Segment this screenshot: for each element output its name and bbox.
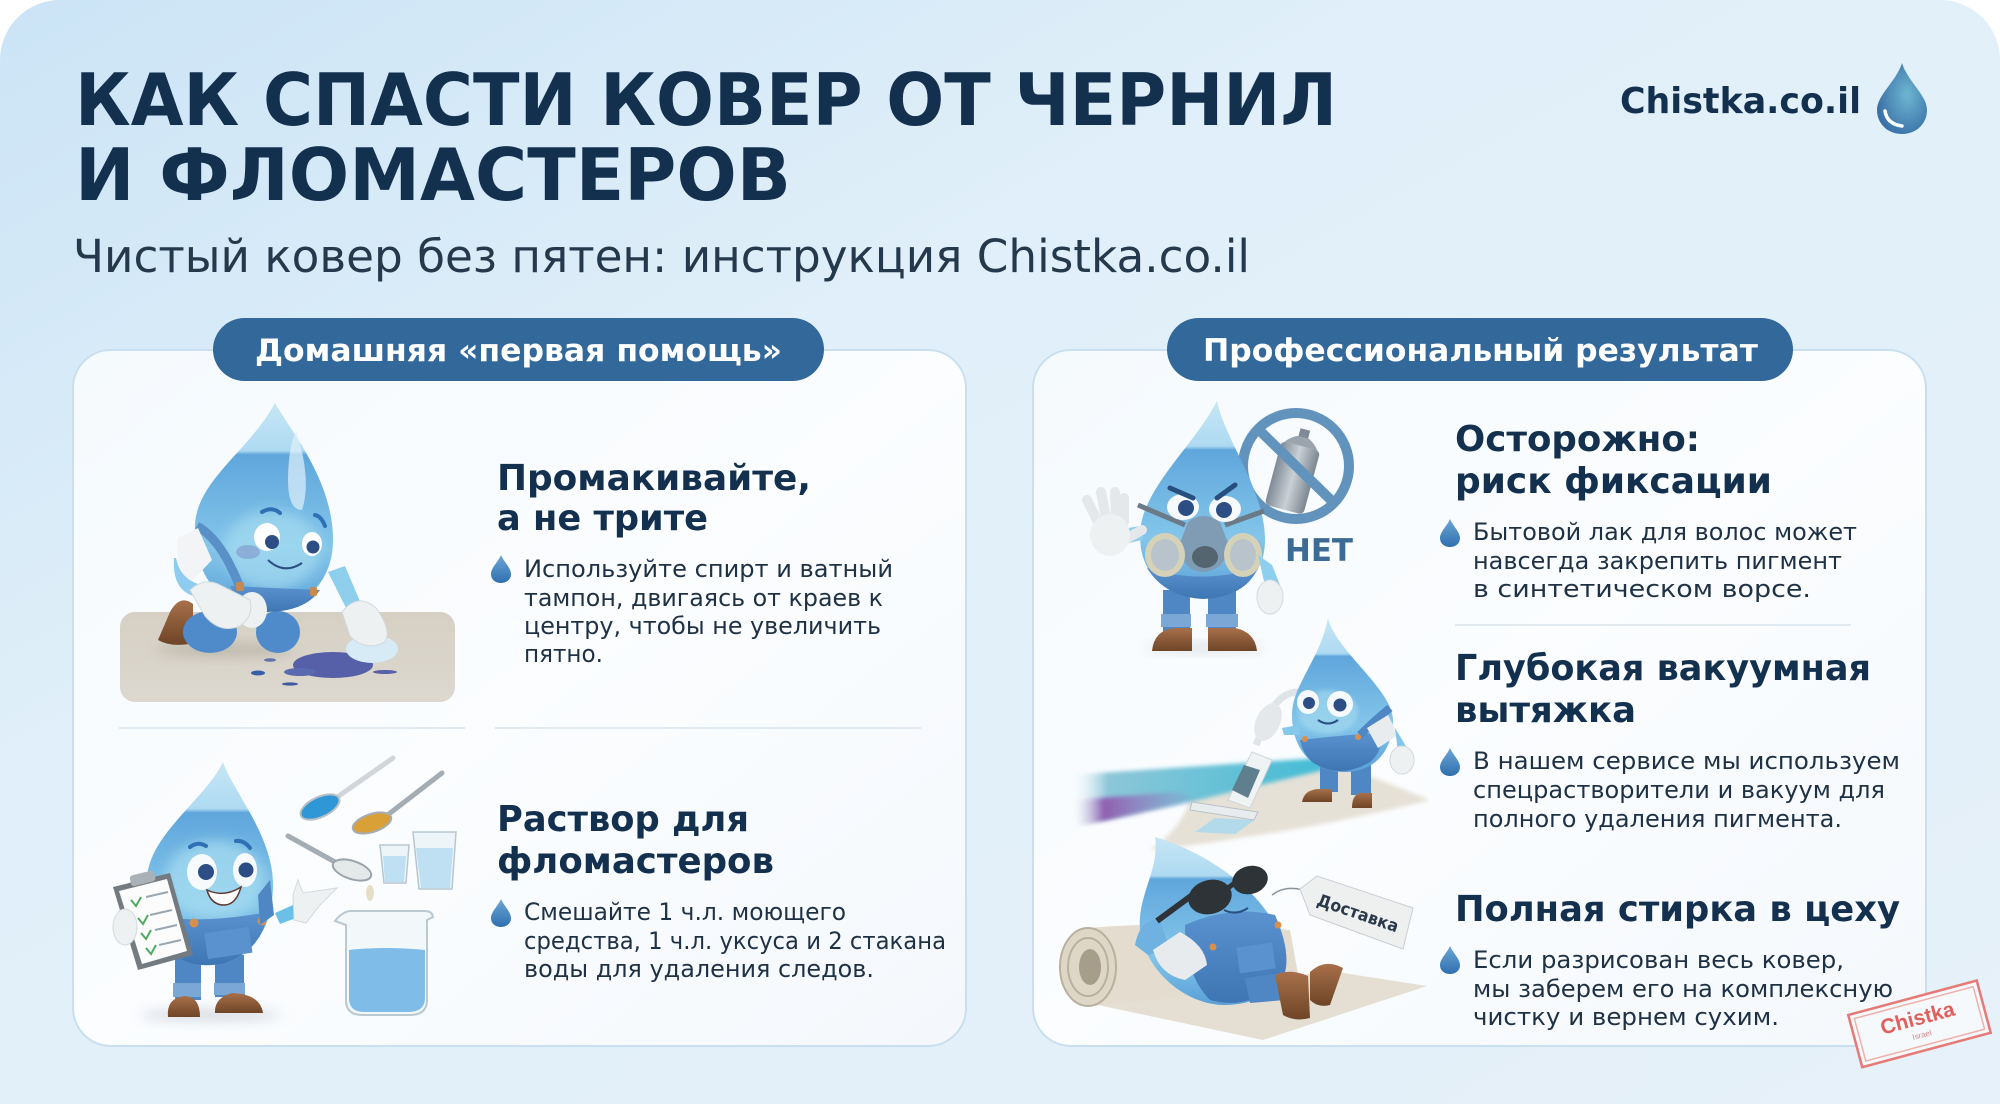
illustration: mascot in respirator refusing hairspray <box>1087 401 1353 652</box>
stamp <box>1848 981 1991 1067</box>
text block: solution <box>491 799 946 983</box>
icon: prohibited spray can <box>1243 413 1349 519</box>
label: delivery tag: Доставка <box>1314 891 1401 937</box>
text block: solution: воды для удаления следов. <box>524 955 874 983</box>
text block: caution: Бытовой лак для волос может <box>1473 518 1857 546</box>
subtitle: Чистый ковер без пятен: инструкция Chistka.co.il <box>73 230 1250 283</box>
stamp: Chistka <box>1878 998 1957 1040</box>
text block: vacuum extraction: полного удаления пигмента. <box>1473 805 1842 833</box>
text block: blot: тампон, двигаясь от краев к <box>524 584 883 612</box>
text block: solution: Раствор для <box>497 799 749 840</box>
illustration: mascot vacuuming carpet <box>1068 618 1430 850</box>
logo <box>1620 63 1927 134</box>
text block: caution: Осторожно: <box>1455 419 1700 460</box>
icon: beaker <box>335 911 433 1015</box>
text block: solution: фломастеров <box>497 841 774 882</box>
heading pill: home <box>213 318 824 381</box>
panel: home first aid <box>73 318 966 1046</box>
text block: blot: Промакивайте, <box>497 458 811 499</box>
icon: glasses <box>380 832 456 889</box>
heading pill: home: Домашняя «первая помощь» <box>255 333 782 369</box>
text block: blot: пятно. <box>524 640 603 668</box>
icon: bullet drop <box>491 555 511 583</box>
text block: full wash <box>1440 889 1900 1031</box>
label: НЕТ: НЕТ <box>1285 533 1353 569</box>
text block: caution: в синтетическом ворсе. <box>1473 575 1811 603</box>
icon: bullet drop <box>1440 519 1460 547</box>
stamp: Israel <box>1911 1028 1933 1042</box>
icon: logo drop <box>1877 63 1927 134</box>
icon: bullet drop <box>491 899 511 927</box>
logo: Chistka.co.il <box>1620 81 1861 122</box>
text block: blot: центру, чтобы не увеличить <box>524 612 881 640</box>
icon: spoons <box>288 758 442 901</box>
text block: vacuum extraction: В нашем сервисе мы используем <box>1473 747 1900 775</box>
text block: vacuum extraction: спецрастворители и вакуум для <box>1473 776 1885 804</box>
text block: vacuum extraction <box>1440 648 1900 833</box>
text block: full wash: Полная стирка в цеху <box>1455 889 1900 930</box>
text block: caution <box>1440 419 1857 603</box>
title: КАК СПАСТИ КОВЕР ОТ ЧЕРНИЛ <box>75 58 1337 142</box>
text block: vacuum extraction: вытяжка <box>1455 690 1636 731</box>
heading pill: professional: Профессиональный результат <box>1203 333 1758 369</box>
text block: blot: Используйте спирт и ватный <box>524 555 893 583</box>
text block: solution: Смешайте 1 ч.л. моющего <box>524 898 846 926</box>
icon: stop hand <box>1087 492 1142 556</box>
text block: caution: риск фиксации <box>1455 461 1772 502</box>
illustration: mascot with solution ingredients <box>113 758 456 1021</box>
text block: vacuum extraction: Глубокая вакуумная <box>1455 648 1871 689</box>
text block: blot <box>491 458 893 668</box>
text block: full wash: мы заберем его на комплексную <box>1473 975 1893 1003</box>
illustration: mascot blotting ink stain <box>120 403 455 702</box>
icon: bullet drop <box>1440 946 1460 974</box>
title <box>75 58 1337 217</box>
text block: blot: а не трите <box>497 498 708 539</box>
illustration: relaxed mascot on rolled carpet with delivery tag <box>1060 837 1427 1040</box>
title: И ФЛОМАСТЕРОВ <box>75 133 791 217</box>
panel: professional result <box>1033 318 1991 1067</box>
text block: solution: средства, 1 ч.л. уксуса и 2 стакана <box>524 927 946 955</box>
icon: bullet drop <box>1440 748 1460 776</box>
label: delivery tag <box>1300 876 1413 949</box>
text block: caution: навсегда закрепить пигмент <box>1473 547 1842 575</box>
heading pill: professional <box>1167 318 1793 381</box>
text block: full wash: чистку и вернем сухим. <box>1473 1003 1779 1031</box>
text block: full wash: Если разрисован весь ковер, <box>1473 946 1844 974</box>
